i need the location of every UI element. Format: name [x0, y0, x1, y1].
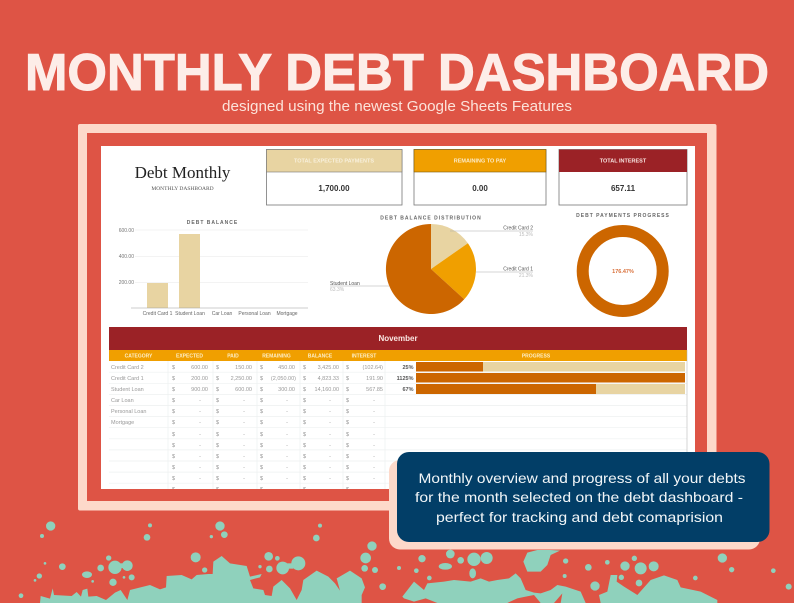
pie chart: debt balance distribution: 21.3% [519, 273, 534, 279]
table values: 200.00 [191, 376, 208, 382]
pie chart: debt balance distribution: Student Loan [330, 281, 360, 287]
table values: - [329, 420, 331, 426]
table column headers: EXPECTED [176, 354, 203, 360]
table dollar signs: $ [172, 454, 175, 460]
table dollar signs: $ [303, 420, 306, 426]
table values: 300.00 [278, 387, 295, 393]
table dollar signs: $ [260, 487, 263, 493]
progress bars: 67% [402, 387, 414, 393]
table values [191, 365, 383, 482]
donut chart: debt payments progress: DEBT PAYMENTS PROGRESS [576, 213, 670, 219]
bar chart: debt balance: Mortgage [276, 311, 298, 317]
table dollar signs: $ [260, 365, 263, 371]
table dollar signs: $ [346, 454, 349, 460]
title: MONTHLY DEBT DASHBOARD [25, 44, 769, 102]
table dollar signs: $ [216, 465, 219, 471]
table values: 567.85 [366, 387, 383, 393]
table dollar signs: $ [260, 476, 263, 482]
progress bars: 25% [402, 365, 414, 371]
table dollar signs: $ [172, 476, 175, 482]
table values: 14,160.00 [315, 387, 339, 393]
bar chart: debt balance [119, 220, 308, 317]
pie chart: debt balance distribution: 15.3% [519, 232, 534, 238]
table values: 191.90 [366, 376, 383, 382]
table dollar signs: $ [346, 432, 349, 438]
pie chart: debt balance distribution: Credit Card 2 [503, 226, 533, 232]
table dollar signs: $ [260, 398, 263, 404]
footer cover: red band below the table [101, 489, 397, 501]
table dollar signs: $ [346, 443, 349, 449]
table dollar signs: $ [346, 376, 349, 382]
table column headers: REMAINING [262, 354, 291, 360]
table values: - [199, 398, 201, 404]
table values: - [329, 398, 331, 404]
KPI: remaining to pay: 0.00 [472, 184, 488, 193]
table values: - [199, 465, 201, 471]
table values: - [286, 398, 288, 404]
dashboard heading [135, 163, 231, 192]
table values: - [286, 432, 288, 438]
table dollar signs: $ [172, 420, 175, 426]
table dollar signs: $ [172, 432, 175, 438]
table dollar signs: $ [260, 376, 263, 382]
table values: - [329, 443, 331, 449]
table dollar signs: $ [346, 465, 349, 471]
table values: - [199, 420, 201, 426]
table column headers: PAID [227, 354, 239, 360]
table dollar signs: $ [303, 454, 306, 460]
table values: 900.00 [191, 387, 208, 393]
table dollar signs: $ [346, 420, 349, 426]
table values: (102.64) [362, 365, 383, 371]
table month header: November [378, 334, 418, 343]
KPI: remaining to pay [414, 150, 546, 205]
KPI: total expected payments [266, 150, 402, 205]
bar chart: debt balance: Student Loan [175, 311, 205, 317]
table values: - [199, 443, 201, 449]
table dollar signs: $ [260, 465, 263, 471]
table values: 150.00 [235, 365, 252, 371]
donut chart: debt payments progress [576, 213, 670, 311]
table dollar signs: $ [172, 409, 175, 415]
table values: - [286, 476, 288, 482]
table values: 600.00 [235, 387, 252, 393]
table values: - [286, 454, 288, 460]
table dollar signs: $ [216, 476, 219, 482]
dashboard heading: MONTHLY DASHBOARD [151, 186, 214, 192]
splatter decoration: right [397, 550, 792, 603]
table values: - [373, 443, 375, 449]
table values: - [199, 476, 201, 482]
table dollar signs: $ [216, 454, 219, 460]
bar chart: debt balance: DEBT BALANCE [187, 220, 238, 226]
table values: 600.00 [191, 365, 208, 371]
table values: - [373, 476, 375, 482]
table values: - [243, 476, 245, 482]
table values: 450.00 [278, 365, 295, 371]
pie chart: debt balance distribution: Credit Card 1 [503, 266, 533, 272]
table dollar signs: $ [260, 420, 263, 426]
KPI: total interest: 657.11 [611, 184, 636, 193]
table values: - [373, 398, 375, 404]
table values: - [373, 432, 375, 438]
table column headers: INTEREST [352, 354, 376, 360]
table dollar signs: $ [172, 365, 175, 371]
subtitle: designed using the newest Google Sheets Features [222, 99, 572, 115]
bar chart: debt balance: 600.00 [119, 228, 134, 234]
table values: 3,425.00 [318, 365, 339, 371]
table dollar signs: $ [172, 443, 175, 449]
table values: - [243, 443, 245, 449]
table dollar signs: $ [303, 409, 306, 415]
table values: - [286, 465, 288, 471]
pie chart: debt balance distribution: 63.3% [330, 287, 345, 293]
table dollar signs: $ [216, 387, 219, 393]
table values: - [373, 409, 375, 415]
table values: - [373, 420, 375, 426]
callout: description: Monthly overview and progress of all your debts [418, 470, 746, 486]
table values: - [199, 409, 201, 415]
dashboard heading: Debt Monthly [135, 163, 231, 182]
table column headers: PROGRESS [522, 354, 551, 360]
table dollar signs: $ [303, 432, 306, 438]
table values: - [329, 454, 331, 460]
table values: - [199, 454, 201, 460]
table category labels: Student Loan [111, 387, 144, 393]
table values: - [243, 454, 245, 460]
table dollar signs: $ [216, 376, 219, 382]
KPI: total interest: TOTAL INTEREST [600, 158, 647, 164]
table dollar signs: $ [346, 409, 349, 415]
splatter decoration: left [19, 521, 386, 603]
table dollar signs: $ [346, 487, 349, 493]
callout: description: perfect for tracking and debt comaprision [436, 509, 723, 525]
table month header [109, 327, 687, 350]
table dollar signs: $ [346, 398, 349, 404]
panel: dashboard frame [78, 124, 716, 510]
table values: - [329, 432, 331, 438]
table values: - [243, 409, 245, 415]
table values: - [286, 443, 288, 449]
progress bars [397, 362, 685, 394]
table dollar signs: $ [303, 443, 306, 449]
bar chart: debt balance: Personal Loan [238, 311, 271, 317]
callout: description: for the month selected on the debt dashboard - [415, 489, 743, 505]
table dollar signs: $ [216, 443, 219, 449]
bar chart: debt balance: 200.00 [119, 280, 134, 286]
table values: (2,050.00) [271, 376, 296, 382]
table dollar signs: $ [216, 420, 219, 426]
table dollar signs: $ [260, 409, 263, 415]
table dollar signs: $ [260, 387, 263, 393]
table values: - [286, 409, 288, 415]
KPI: remaining to pay: REMAINING TO PAY [454, 158, 507, 164]
table dollar signs: $ [260, 432, 263, 438]
pie chart: debt balance distribution [330, 216, 534, 314]
table: November debts [109, 327, 687, 493]
bar chart: debt balance: 400.00 [119, 254, 134, 260]
table column headers: BALANCE [308, 354, 333, 360]
table dollar signs: $ [303, 376, 306, 382]
table dollar signs: $ [260, 454, 263, 460]
table dollar signs: $ [303, 398, 306, 404]
table dollar signs: $ [303, 487, 306, 493]
table dollar signs: $ [172, 387, 175, 393]
table dollar signs: $ [303, 365, 306, 371]
table dollar signs: $ [303, 387, 306, 393]
table dollar signs: $ [303, 465, 306, 471]
table dollar signs: $ [216, 432, 219, 438]
table values: - [329, 476, 331, 482]
table category labels: Credit Card 2 [111, 365, 144, 371]
bar chart: debt balance: Credit Card 1 [143, 311, 173, 317]
table dollar signs: $ [172, 398, 175, 404]
table dollar signs: $ [260, 443, 263, 449]
table dollar signs: $ [346, 387, 349, 393]
table values: 4,823.33 [318, 376, 339, 382]
table values: 2,250.00 [231, 376, 252, 382]
table dollar signs: $ [346, 365, 349, 371]
table values: - [243, 432, 245, 438]
table column headers: CATEGORY [125, 354, 153, 360]
table column headers [109, 350, 687, 361]
bar chart: debt balance: Car Loan [212, 311, 232, 317]
KPI: total expected payments: 1,700.00 [318, 184, 350, 193]
table category labels [111, 365, 146, 426]
table category labels: Mortgage [111, 420, 134, 426]
table dollar signs: $ [216, 365, 219, 371]
donut chart: debt payments progress: 176.47% [612, 269, 634, 275]
KPI: total interest [559, 150, 687, 205]
table category labels: Car Loan [111, 398, 134, 404]
pie chart: debt balance distribution: DEBT BALANCE DISTRIBUTION [380, 216, 482, 222]
KPI: total expected payments: TOTAL EXPECTED PAYMENTS [294, 158, 374, 164]
table dollar signs: $ [216, 487, 219, 493]
table category labels: Personal Loan [111, 409, 146, 415]
table values: - [243, 465, 245, 471]
callout: description [389, 452, 770, 550]
table dollar signs: $ [172, 376, 175, 382]
table category labels: Credit Card 1 [111, 376, 144, 382]
table values: - [329, 409, 331, 415]
table values: - [373, 465, 375, 471]
table values: - [286, 420, 288, 426]
table values: - [243, 398, 245, 404]
table dollar signs: $ [172, 487, 175, 493]
table dollar signs: $ [216, 409, 219, 415]
table dollar signs: $ [216, 398, 219, 404]
table grid [109, 361, 687, 489]
table dollar signs: $ [172, 465, 175, 471]
table dollar signs [172, 365, 349, 493]
progress bars: 1125% [397, 376, 414, 382]
table values: - [373, 454, 375, 460]
table dollar signs: $ [303, 476, 306, 482]
table values: - [199, 432, 201, 438]
table dollar signs: $ [346, 476, 349, 482]
table values: - [329, 465, 331, 471]
table values: - [243, 420, 245, 426]
